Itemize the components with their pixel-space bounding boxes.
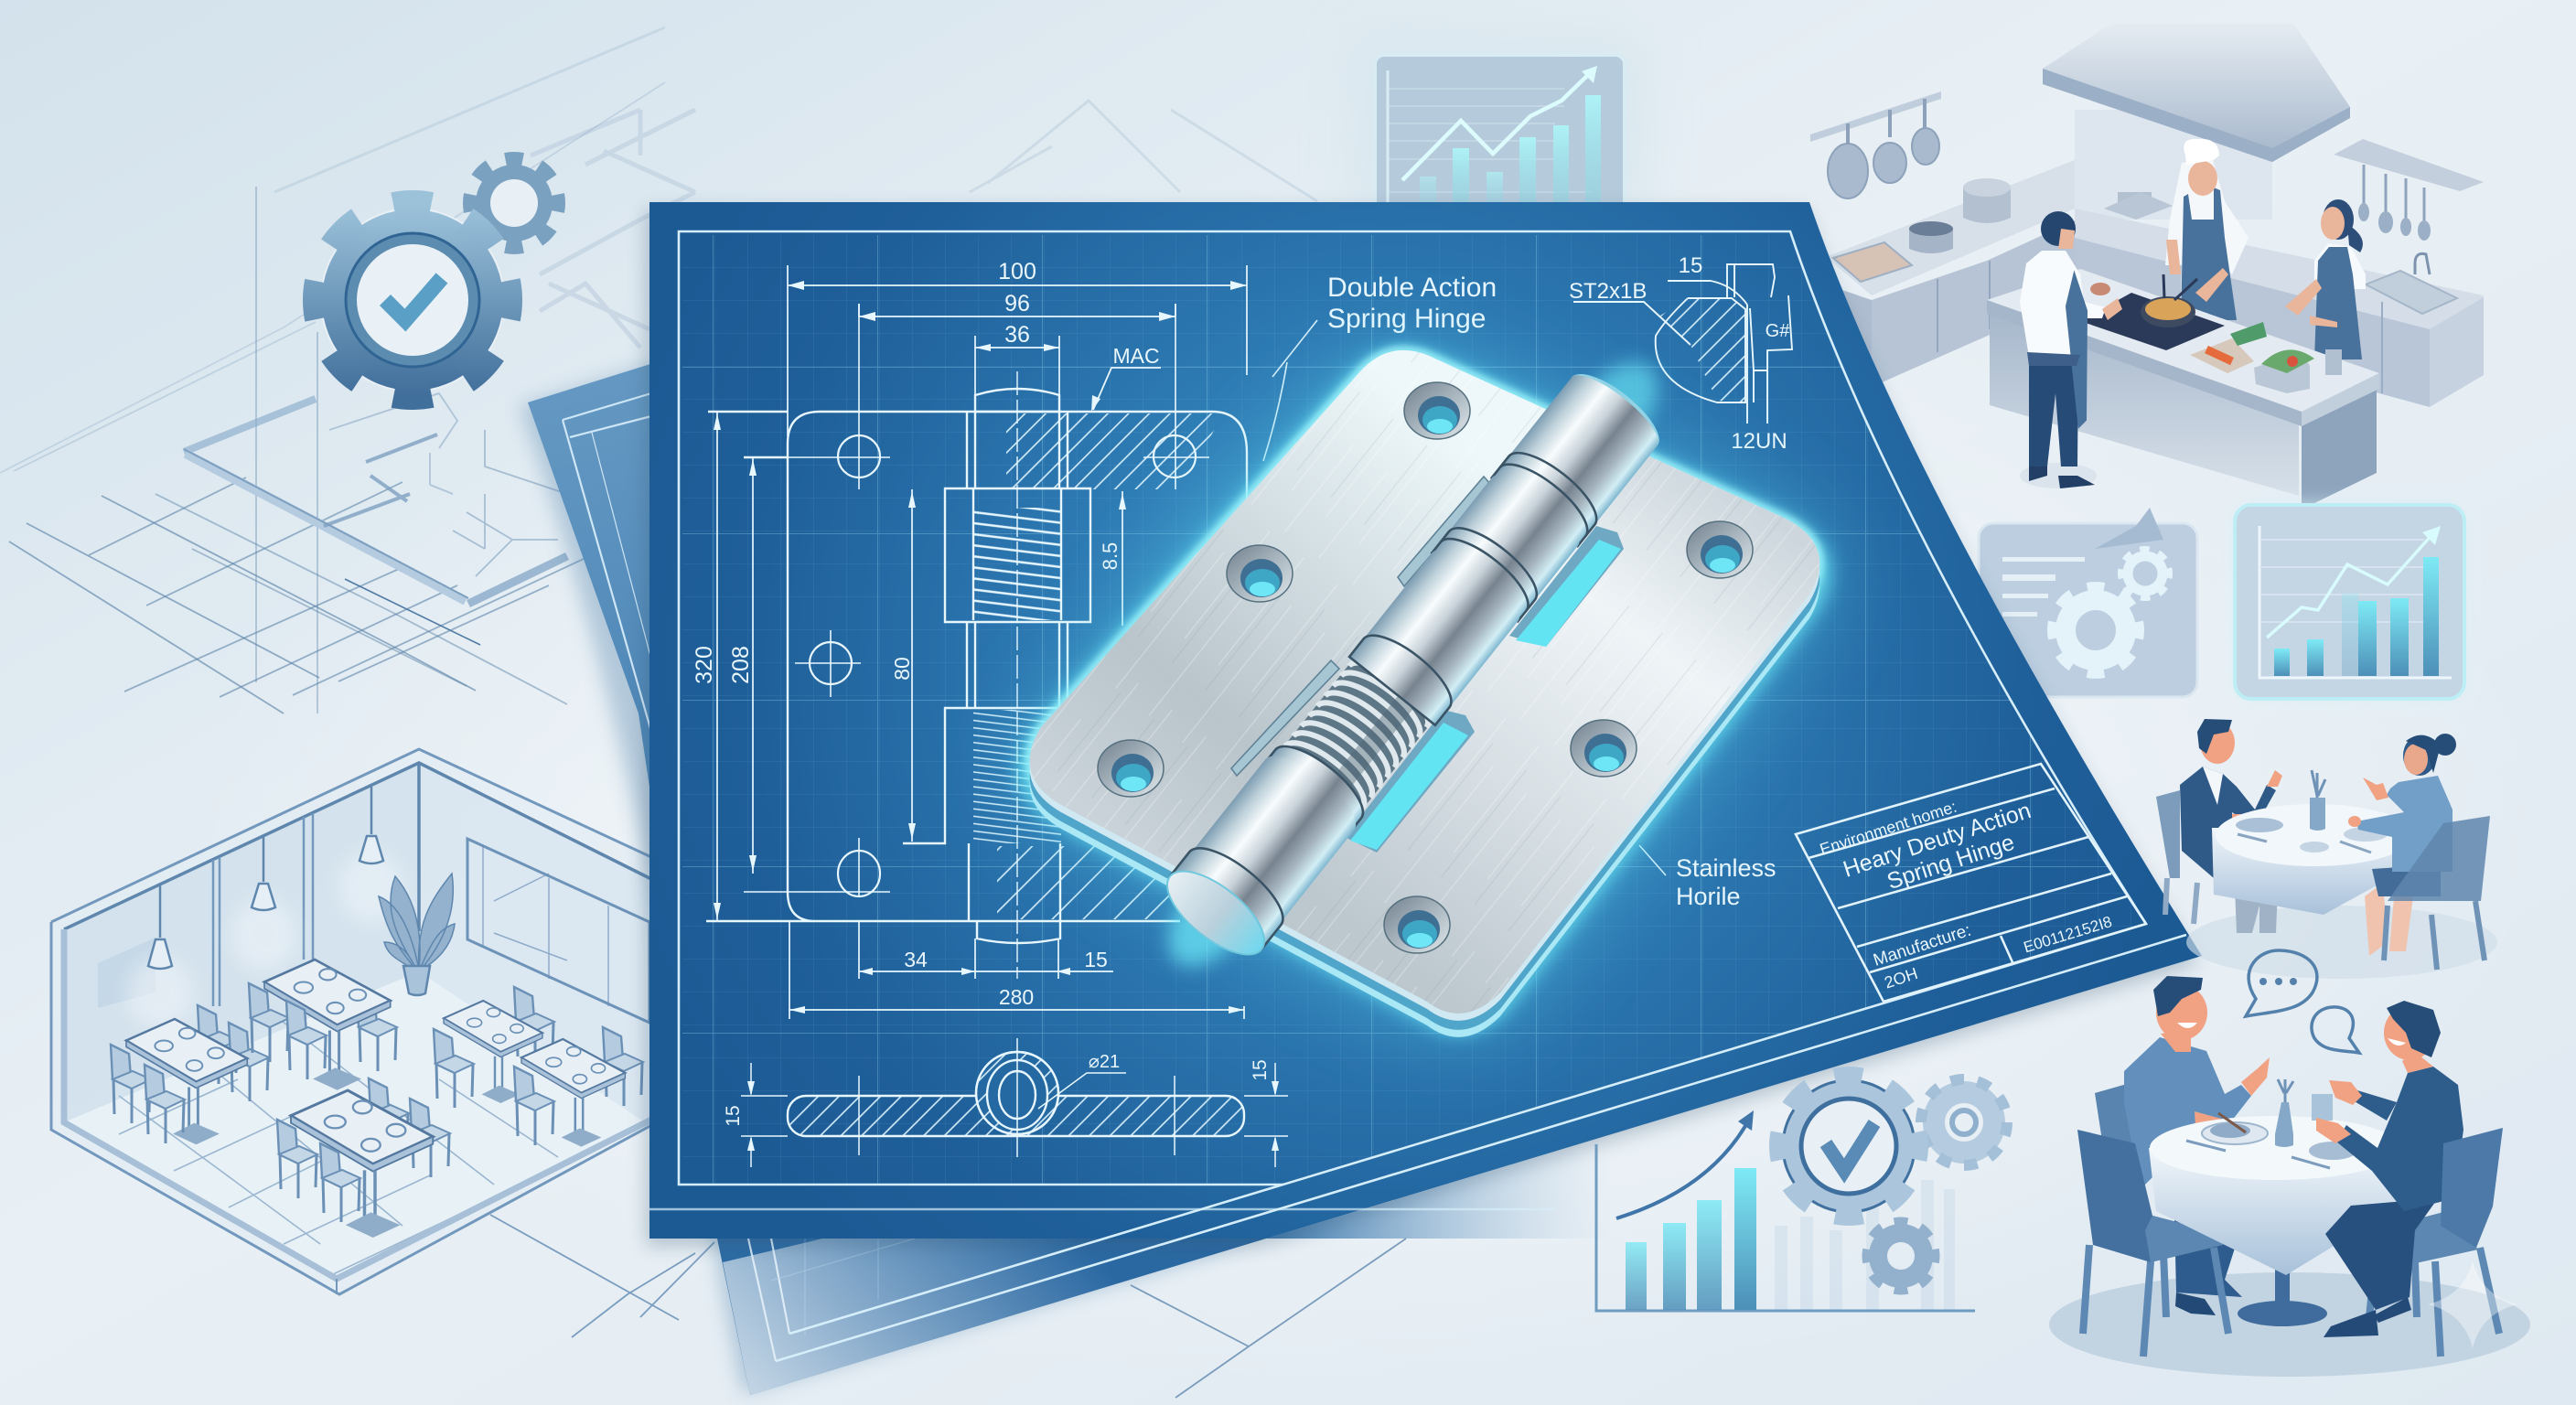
pendant lamps	[127, 787, 404, 1029]
sink	[2366, 253, 2457, 314]
chart bars	[1420, 95, 1601, 204]
chair right	[2384, 816, 2490, 970]
lower knuckle	[1355, 537, 1530, 718]
MAC leader	[1093, 368, 1161, 410]
callout: Stainless: Stainless	[1676, 854, 1776, 882]
dimension labels	[692, 259, 1271, 1127]
dimension labels: 15	[1250, 1059, 1271, 1081]
floor tiles	[119, 1015, 558, 1276]
barrel	[1154, 359, 1673, 970]
centre line	[1016, 371, 1018, 979]
figure: woman cook	[2285, 199, 2366, 359]
diners: upper table	[2156, 719, 2497, 979]
title block: E00112152I8	[2022, 913, 2114, 956]
trend arrow	[1402, 66, 1597, 180]
speech bubble with dots	[2246, 950, 2317, 1016]
pin and spring bodies	[903, 389, 1090, 943]
title block: 2OH	[1882, 964, 1920, 992]
man in suit	[2180, 719, 2282, 933]
left channels	[1231, 477, 1491, 776]
icon: right gear	[1921, 1079, 2007, 1165]
vase	[2275, 1079, 2293, 1147]
dimension labels: 36	[1004, 322, 1030, 348]
dimension labels: 80	[890, 657, 914, 681]
technical detail: section at top right: 12UN	[1731, 429, 1787, 454]
chair left	[2156, 790, 2197, 924]
dimension labels: 100	[998, 259, 1036, 284]
mounting holes	[744, 304, 1209, 896]
potted plant	[379, 874, 455, 995]
dimension arrows	[714, 281, 1247, 1014]
sparkle mark	[2428, 1260, 2517, 1348]
middle knuckle	[1446, 462, 1590, 604]
callout: Double Action Spring Hinge	[1263, 273, 1497, 461]
lower collar	[1261, 735, 1374, 836]
cooktop and wok	[2080, 274, 2225, 350]
dining tables and chairs	[111, 960, 643, 1238]
blueprint grid	[682, 235, 2146, 1185]
dimension labels: ⌀21	[1089, 1052, 1120, 1072]
left chair	[2077, 1130, 2228, 1357]
chart bars	[2274, 557, 2439, 676]
band fading at the right of the lower edge	[1266, 1134, 1610, 1239]
floor shadow	[2049, 1272, 2530, 1377]
title block: Heary Deuty Action	[1840, 798, 2034, 883]
sheet frame	[649, 231, 2186, 1361]
main blueprint sheet	[646, 202, 2202, 1361]
dimension labels: MAC	[1112, 344, 1160, 368]
technical detail: section at top right: 15	[1679, 253, 1702, 278]
right chair back	[2441, 1128, 2503, 1248]
plate edge thickness	[1030, 358, 1819, 1037]
dimension labels: 15	[1084, 948, 1108, 971]
floor plan sketch lines, upper left	[0, 27, 1317, 713]
right chair	[2359, 1211, 2499, 1357]
dimension labels: 208	[728, 646, 754, 684]
bottom chart with gears	[1596, 1077, 2007, 1311]
end collar	[1170, 835, 1294, 949]
title block	[1796, 764, 2146, 1002]
end knuckle	[1188, 744, 1367, 927]
under blueprint sheet	[521, 359, 1610, 1395]
wall picture	[98, 938, 156, 1008]
dimension labels: 15	[723, 1105, 744, 1127]
hinge	[1030, 349, 1820, 1037]
icon: large gear with check mark	[317, 161, 556, 395]
back counters	[1826, 160, 2484, 407]
hinge glow	[1030, 348, 1819, 1023]
chart bars	[1626, 1168, 1756, 1310]
man in sweater	[2124, 976, 2270, 1315]
callout: Stainless	[1639, 845, 1776, 910]
range hood	[2043, 23, 2350, 220]
under sheet frame lines	[563, 393, 789, 1361]
dimension lines	[717, 265, 1247, 1019]
right shelf and utensils	[2334, 139, 2484, 241]
title block: Spring Hinge	[1884, 830, 2018, 895]
kitchen island	[1987, 269, 2379, 509]
plate face	[1030, 349, 1820, 1014]
dimension labels: 320	[692, 646, 717, 684]
room walls	[51, 749, 677, 1294]
restaurant isometric cutaway	[51, 749, 677, 1294]
table	[2212, 770, 2415, 915]
technical detail: section at top right: G#	[1766, 321, 1790, 341]
icon: lower gear	[1867, 1222, 1935, 1290]
pots and tray	[1833, 178, 2173, 282]
countersunk holes	[1098, 382, 1753, 953]
panel: growth chart card	[2235, 505, 2464, 699]
hatched sections	[997, 413, 1224, 919]
floor lines, lower centre	[490, 1215, 1406, 1398]
section view dimensions	[741, 1038, 1288, 1167]
hanging pans	[1810, 91, 1941, 198]
left chair back, far side	[2095, 1084, 2141, 1153]
collar at spring end	[1349, 623, 1462, 725]
man in dark suit	[2312, 1001, 2463, 1337]
trend arrow	[2267, 526, 2441, 638]
dimension labels: 34	[904, 948, 928, 971]
middle collar	[1432, 516, 1548, 621]
dimension labels: 8.5	[1099, 542, 1122, 570]
technical detail: section at top right: ST2x1B	[1569, 279, 1647, 304]
growth arrow	[1616, 1110, 1754, 1218]
table pedestal	[2238, 1267, 2327, 1326]
end cap	[1154, 856, 1278, 970]
title block: Environment home:	[1818, 798, 1959, 859]
plate outline	[706, 412, 1247, 921]
technical detail: section at top right	[1569, 253, 1792, 454]
kitchen window	[467, 839, 649, 1023]
speech bubble empty	[2312, 1007, 2359, 1053]
section view slot	[788, 1052, 1244, 1136]
callout: Double Action Spring Hinge: Double Action	[1327, 273, 1497, 303]
top knuckle	[1508, 362, 1669, 525]
table cloth and top	[2149, 1116, 2400, 1275]
place settings	[2186, 1113, 2356, 1168]
icon: check gear	[1779, 1077, 1918, 1216]
callout: Stainless: Horile	[1676, 883, 1741, 910]
spring coils	[1276, 641, 1446, 819]
figure: cook in foreground	[2020, 211, 2122, 488]
callout: Double Action Spring Hinge: Spring Hinge	[1327, 304, 1486, 334]
cyan slots	[1345, 526, 1624, 853]
cutting board and vegetables	[2190, 322, 2342, 393]
chart axes	[1596, 1144, 1975, 1311]
dimension labels: 96	[1004, 291, 1030, 316]
text lines	[2002, 557, 2085, 617]
icon: small gear	[472, 161, 556, 245]
panel: top glowing chart	[1354, 37, 1647, 220]
title block: Manufacture:	[1871, 921, 1973, 971]
technical drawing: front view	[706, 265, 1288, 1167]
dimension labels: 280	[999, 985, 1034, 1009]
upper collar	[1492, 441, 1607, 546]
panel: settings card	[1979, 508, 2197, 697]
faded background bars	[1775, 1180, 1955, 1311]
icon: settings gears	[2054, 550, 2169, 672]
woman	[2348, 734, 2456, 956]
figure: chef at centre	[2165, 139, 2249, 320]
kitchen scene	[1810, 23, 2484, 509]
diners: lower table	[2049, 950, 2530, 1377]
